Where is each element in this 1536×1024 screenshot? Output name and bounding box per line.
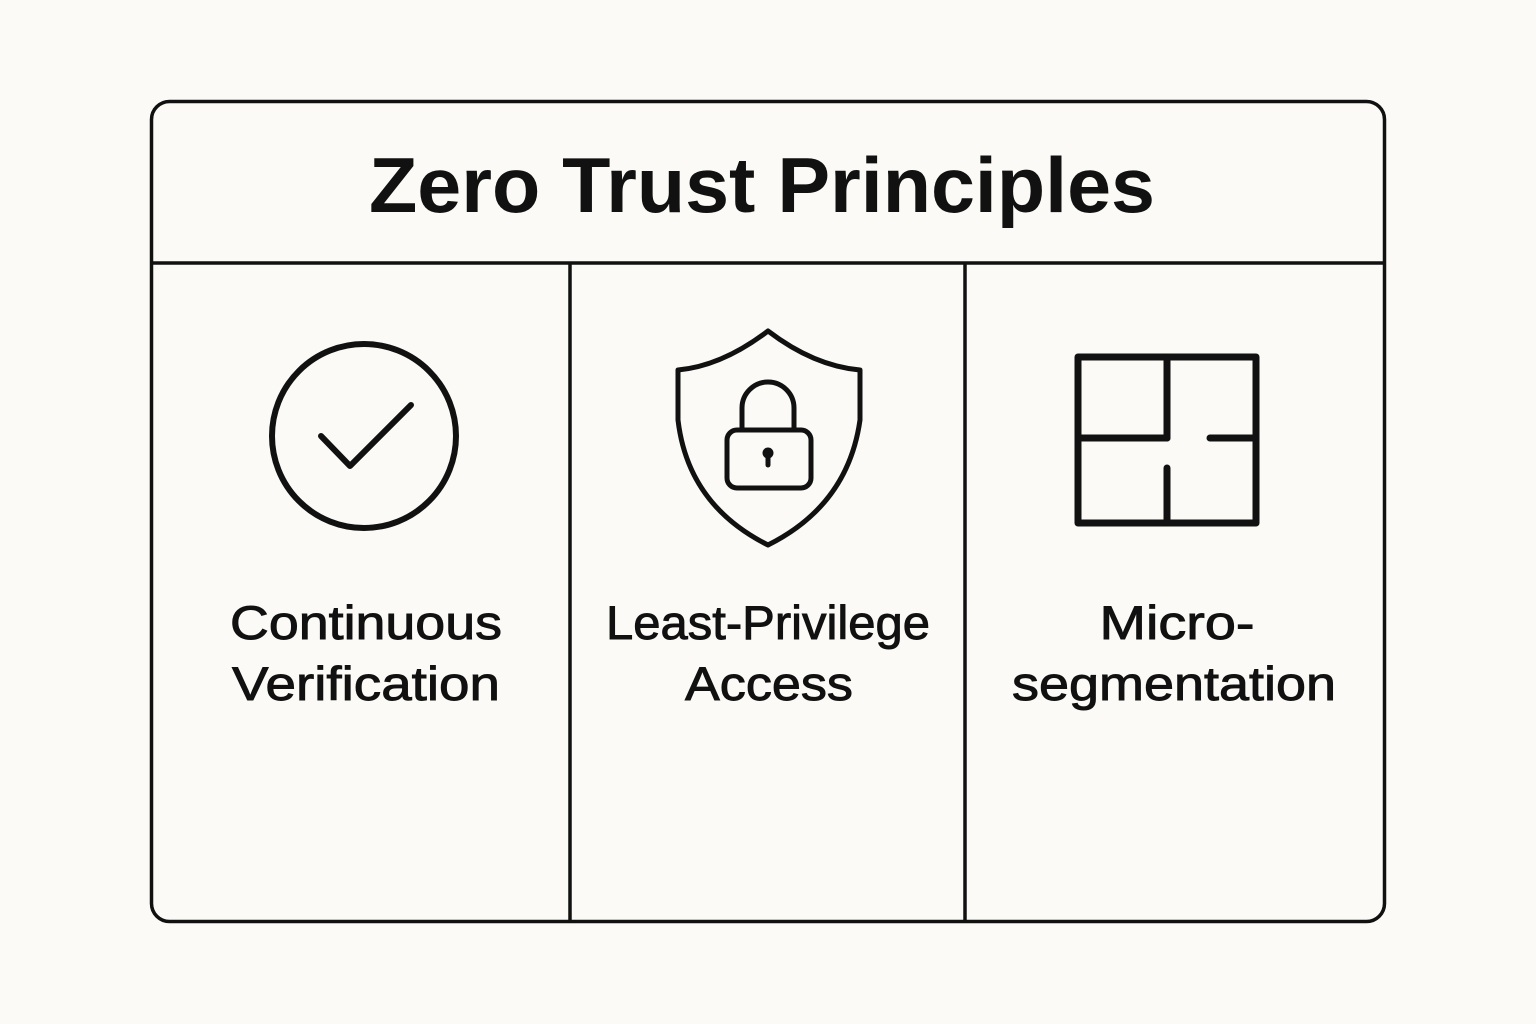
- label: micro-segmentation: segmentation: [1012, 657, 1336, 710]
- label: least-privilege access: Access: [685, 657, 853, 710]
- label: continuous verification: [230, 596, 502, 710]
- label: continuous verification: Continuous: [230, 596, 502, 649]
- label: least-privilege access: Least-Privilege: [606, 596, 930, 649]
- panel: main frame: [151, 102, 1384, 922]
- title: Zero Trust Principles: [369, 141, 1155, 229]
- icon: segmented grid: [1078, 357, 1256, 523]
- icon: shield with lock: [678, 331, 860, 545]
- panel: micro-segmentation: [1012, 357, 1336, 710]
- panel: continuous verification: [230, 344, 502, 710]
- label: micro-segmentation: [1012, 596, 1336, 710]
- label: continuous verification: Verification: [232, 657, 500, 710]
- icon: check circle: [272, 344, 456, 528]
- label: micro-segmentation: Micro-: [1100, 596, 1254, 649]
- panel: least-privilege access: [606, 331, 930, 710]
- label: least-privilege access: [606, 596, 930, 710]
